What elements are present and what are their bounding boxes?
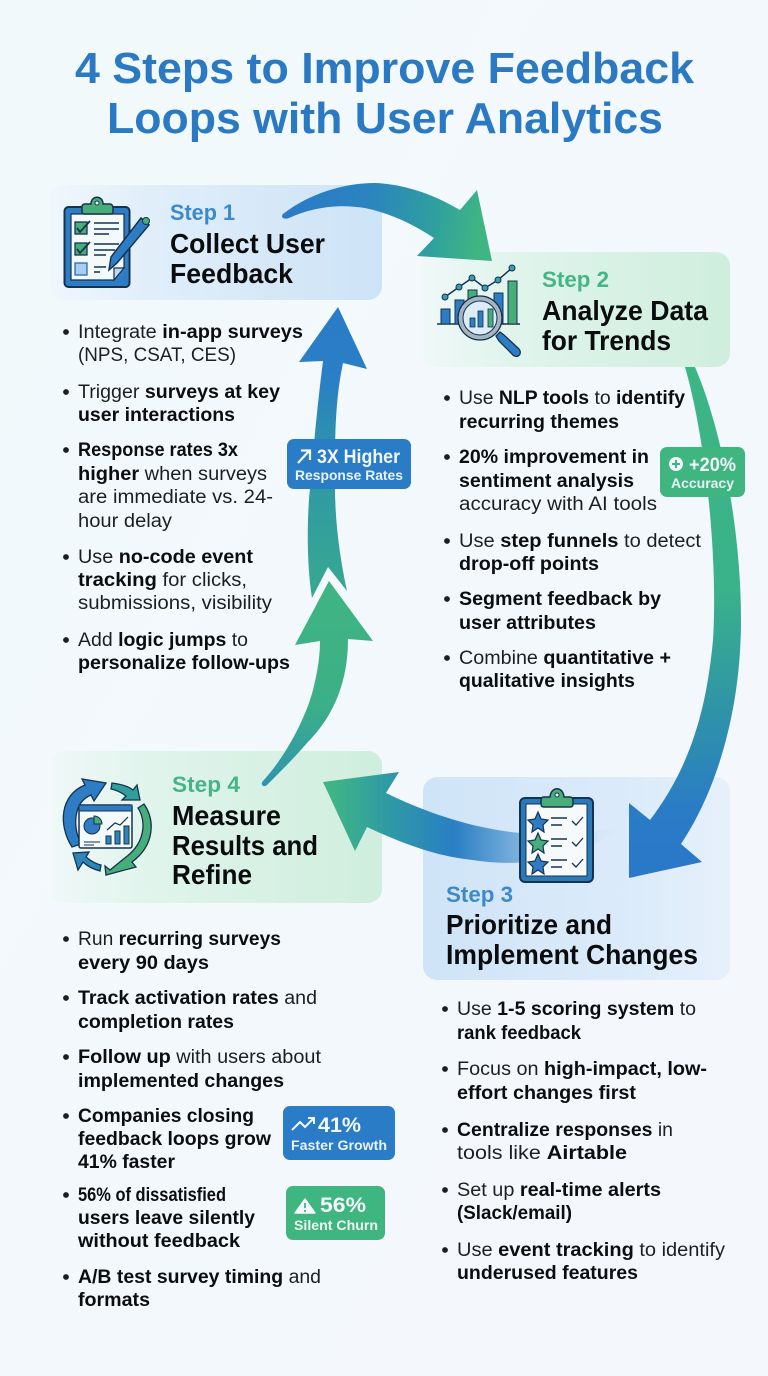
bullet: combine insights: Combine quantitative + xyxy=(459,648,671,669)
badge: +20% accuracy: +20% xyxy=(689,455,736,476)
bullet: scoring system xyxy=(442,999,696,1044)
bullet: closing loops: 41% faster xyxy=(78,1152,176,1173)
step 4 heading: Results and xyxy=(172,830,318,861)
bullet: event tracking: underused features xyxy=(457,1263,638,1284)
title xyxy=(75,44,695,143)
step 3 heading: Prioritize and xyxy=(446,909,612,940)
bullet: segment feedback: Segment feedback by xyxy=(459,589,661,610)
bullet: combine insights xyxy=(444,648,671,692)
bullet: response rates: Response rates 3x xyxy=(78,440,238,461)
bullet: recurring surveys xyxy=(63,929,281,974)
title: Loops with User Analytics xyxy=(107,94,663,143)
arrow: step 4 to step 1, lower segment xyxy=(262,581,373,786)
bullet: sentiment analysis xyxy=(444,447,657,515)
step 3 heading: Implement Changes xyxy=(446,939,698,970)
bullet: trigger surveys: user interactions xyxy=(78,405,235,426)
icon: analytics window in cycle arrows xyxy=(63,779,151,875)
bullet: event tracking xyxy=(63,547,273,614)
bullet: dissatisfied users: users leave silently xyxy=(78,1208,255,1229)
panel: step 1 background xyxy=(50,185,382,300)
bullet: scoring system: Use 1-5 scoring system to xyxy=(457,999,696,1020)
bullet: A/B test: A/B test survey timing and xyxy=(78,1267,321,1288)
badge: 3X higher response rates: 3X Higher xyxy=(317,447,401,468)
bullet: closing loops: Companies closing xyxy=(78,1106,254,1127)
bullet: follow up: implemented changes xyxy=(78,1071,284,1092)
bullet: dissatisfied users: 56% of dissatisfied xyxy=(78,1185,226,1206)
bullet: recurring surveys: every 90 days xyxy=(78,953,209,974)
bullet: centralize responses: Centralize responses in xyxy=(457,1120,673,1141)
bullet: real-time alerts xyxy=(442,1180,661,1224)
bullet: trigger surveys: Trigger surveys at key xyxy=(78,382,280,403)
bullet: response rates xyxy=(63,440,273,532)
bullet: event tracking: Use event tracking to identify xyxy=(457,1240,726,1261)
step 1 heading: Step 1 xyxy=(170,200,235,225)
bullet: logic jumps xyxy=(63,630,290,674)
bullet: high-impact changes xyxy=(442,1059,707,1104)
bullet: event tracking xyxy=(442,1240,726,1284)
bullet: logic jumps: personalize follow-ups xyxy=(78,653,290,674)
bullet: NLP tools xyxy=(444,388,685,433)
step 2 heading: for Trends xyxy=(542,325,671,356)
arrow: step 3 to step 4 xyxy=(323,772,625,863)
step 1 bullet list xyxy=(63,322,303,674)
bullet: dissatisfied users: without feedback xyxy=(77,1231,240,1252)
step 2 heading: Step 2 xyxy=(542,267,609,292)
arrow: step 4 to step 1, upper segment xyxy=(299,307,367,598)
badge: 41% faster growth xyxy=(283,1106,395,1160)
bullet: step funnels: Use step funnels to detect xyxy=(459,531,702,552)
bullet: activation rates: Track activation rates and xyxy=(78,988,317,1009)
badge: 3X higher response rates xyxy=(287,439,411,489)
bullet: real-time alerts: (Slack/email) xyxy=(457,1203,572,1224)
bullet: A/B test: formats xyxy=(78,1290,150,1311)
bullet: follow up xyxy=(63,1047,322,1092)
bullet: dissatisfied users xyxy=(63,1185,255,1252)
bullet: step funnels: drop-off points xyxy=(459,554,599,575)
bullet: high-impact changes: effort changes first xyxy=(457,1083,637,1104)
bullet: NLP tools: Use NLP tools to identify xyxy=(459,388,685,409)
step 3 bullet list xyxy=(442,999,726,1284)
bullet: real-time alerts: Set up real-time alerts xyxy=(457,1180,661,1201)
bullet: sentiment analysis: sentiment analysis xyxy=(459,471,634,492)
bullet: sentiment analysis: accuracy with AI tools xyxy=(459,494,657,515)
bullet: response rates: are immediate vs. 24- xyxy=(78,487,273,508)
badge: 56% silent churn xyxy=(286,1186,385,1240)
bullet: logic jumps: Add logic jumps to xyxy=(78,630,248,651)
bullet: closing loops xyxy=(63,1106,271,1173)
bullet: segment feedback: user attributes xyxy=(459,613,596,634)
bullet: high-impact changes: Focus on high-impact, low- xyxy=(457,1059,707,1080)
step 4 heading: Refine xyxy=(172,859,252,890)
bullet: response rates: higher when surveys xyxy=(78,464,267,485)
icon: clipboard with checklist and pen xyxy=(64,197,150,287)
bullet: in-app surveys: (NPS, CSAT, CES) xyxy=(78,345,236,366)
arrow: step 2 to step 3 xyxy=(629,367,741,878)
badge: 41% faster growth: Faster Growth xyxy=(291,1137,387,1153)
bullet: NLP tools: recurring themes xyxy=(459,412,619,433)
bullet: sentiment analysis: 20% improvement in xyxy=(459,447,649,468)
bullet: recurring surveys: Run recurring surveys xyxy=(78,929,281,950)
bullet: centralize responses xyxy=(442,1120,673,1164)
step 3 heading xyxy=(446,882,698,970)
bullet: event tracking: submissions, visibility xyxy=(78,593,273,614)
step 1 heading: Feedback xyxy=(170,258,294,289)
bullet: event tracking: tracking for clicks, xyxy=(78,570,247,591)
step 4 heading: Measure xyxy=(172,800,281,831)
step 3 heading: Step 3 xyxy=(446,882,513,907)
badge: +20% accuracy: Accuracy xyxy=(671,475,734,491)
step 1 heading xyxy=(170,200,325,289)
panel: step 2 background xyxy=(420,252,730,367)
badge: +20% accuracy xyxy=(660,447,745,497)
badge: 41% faster growth: 41% xyxy=(318,1114,361,1137)
step 1 heading: Collect User xyxy=(170,228,325,259)
icon: bar chart with magnifier xyxy=(437,265,520,356)
bullet: scoring system: rank feedback xyxy=(457,1023,581,1044)
badge: 56% silent churn: 56% xyxy=(320,1194,366,1217)
arrow: step 1 to step 2 xyxy=(282,183,492,261)
bullet: closing loops: feedback loops grow xyxy=(78,1129,271,1150)
bullet: trigger surveys xyxy=(63,382,280,426)
bullet: event tracking: Use no-code event xyxy=(78,547,254,568)
icon: clipboard with star ratings xyxy=(520,789,593,882)
bullet: in-app surveys: Integrate in-app surveys xyxy=(78,322,303,343)
badge: 3X higher response rates: Response Rates xyxy=(295,467,403,483)
bullet: centralize responses: tools like Airtable xyxy=(457,1143,627,1164)
panel: step 3 background xyxy=(423,777,730,980)
bullet: activation rates: completion rates xyxy=(78,1012,234,1033)
bullet: response rates: hour delay xyxy=(78,511,173,532)
panel: step 4 background xyxy=(50,751,382,903)
bullet: activation rates xyxy=(63,988,317,1033)
step 4 heading: Step 4 xyxy=(172,772,241,797)
bullet: follow up: Follow up with users about xyxy=(78,1047,322,1068)
step 2 heading: Analyze Data xyxy=(542,295,709,326)
step 2 heading xyxy=(542,267,709,356)
step 2 bullet list xyxy=(444,388,702,692)
step 4 bullet list xyxy=(63,929,322,1311)
bullet: A/B test xyxy=(63,1267,321,1311)
bullet: segment feedback xyxy=(444,589,661,634)
badge: 56% silent churn: Silent Churn xyxy=(294,1217,378,1233)
bullet: step funnels xyxy=(444,531,702,575)
bullet: combine insights: qualitative insights xyxy=(459,671,635,692)
bullet: in-app surveys xyxy=(63,322,303,366)
step 4 heading xyxy=(172,772,318,890)
title: 4 Steps to Improve Feedback xyxy=(75,44,695,93)
